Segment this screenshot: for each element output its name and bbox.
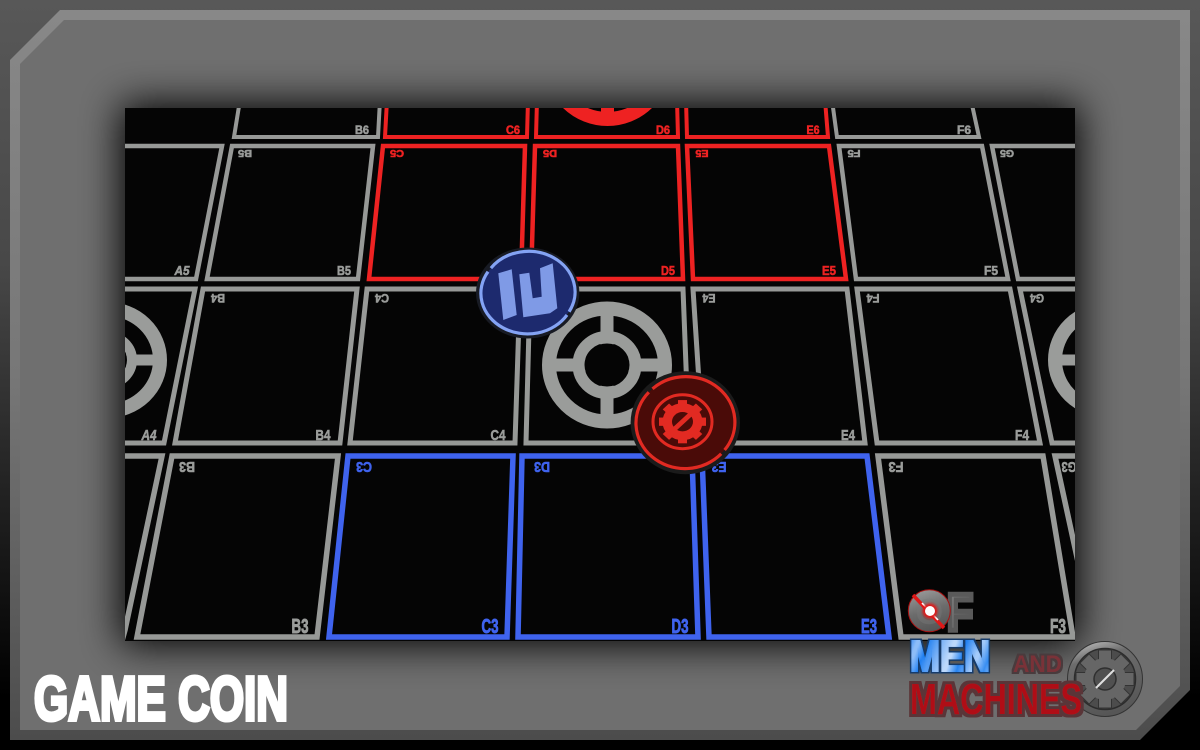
logo: gear emblem: [1068, 642, 1142, 716]
cell labels: grey: [141, 123, 1076, 638]
cell labels: grey: F5: [984, 263, 998, 278]
cell labels: grey: B5: [337, 263, 351, 278]
cell labels: grey: B3: [179, 458, 195, 475]
cell labels: grey: A4: [141, 427, 157, 444]
cell labels: red: C6: [506, 123, 520, 137]
cell labels: grey: B6: [355, 123, 369, 137]
cell labels: blue: D3: [672, 616, 688, 638]
icon: blue men coin: [476, 248, 579, 338]
cell labels: grey: B4: [211, 291, 225, 305]
cell labels: grey: F3: [888, 458, 904, 475]
grid: red team cells: [369, 100, 846, 279]
cell labels: grey: C4: [490, 427, 506, 444]
cell labels: blue: D3: [534, 458, 550, 475]
cell labels: grey: F4: [866, 291, 880, 305]
target: right grey circle: [1048, 312, 1075, 408]
cell labels: red: [390, 123, 836, 278]
cell labels: grey: G4: [1030, 291, 1044, 305]
title: GAME COIN: [34, 665, 288, 734]
cell labels: red: D5: [543, 147, 557, 158]
board drop shadow: [121, 104, 1079, 645]
cell labels: grey: C4: [375, 291, 389, 305]
icon: red machines coin: [631, 371, 740, 474]
cell labels: grey: F4: [1015, 427, 1030, 444]
cell labels: blue: C3: [356, 458, 372, 475]
cell labels: grey: B3: [292, 616, 308, 638]
cell labels: blue: E3: [712, 458, 726, 475]
cell labels: grey: B5: [238, 147, 252, 158]
cell labels: red: E6: [806, 123, 820, 137]
cell labels: grey: G5: [1000, 147, 1014, 158]
grid: neutral grey cells: [125, 108, 1075, 640]
cell labels: grey: A5: [174, 263, 190, 278]
cell labels: red: D5: [661, 263, 675, 278]
cell labels: grey: F5: [847, 147, 860, 158]
grid: blue team cells: [329, 456, 889, 637]
cell labels: red: E5: [822, 263, 836, 278]
cell labels: red: C5: [390, 147, 404, 158]
cell labels: blue: [356, 458, 877, 638]
logo: word OF: F: [947, 584, 973, 642]
target: left grey circle: [125, 304, 167, 416]
cell labels: grey: G3: [1062, 458, 1076, 475]
target: top red circle: [563, 108, 652, 126]
logo: word MEN: MEN: [910, 632, 990, 681]
cell labels: grey: E4: [841, 427, 855, 444]
logo: word OF: O: [915, 591, 943, 632]
cell labels: grey: B4: [316, 427, 331, 444]
cell labels: grey: F3: [1050, 616, 1066, 638]
cell labels: grey: E4: [702, 291, 716, 305]
logo: word OF: [908, 584, 973, 642]
target: centre grey circle: [549, 308, 665, 422]
logo: word MACHINES: MACHINES: [910, 675, 1082, 724]
logo: of men and machines: [908, 584, 1142, 724]
panel: game board: [125, 108, 1075, 641]
cell labels: blue: E3: [861, 616, 877, 638]
cell labels: red: D6: [656, 123, 670, 137]
logo: word AND: AND: [1013, 651, 1062, 678]
cell labels: blue: C3: [482, 616, 498, 638]
cell labels: grey: F6: [957, 123, 971, 137]
cell labels: red: E5: [695, 147, 709, 158]
